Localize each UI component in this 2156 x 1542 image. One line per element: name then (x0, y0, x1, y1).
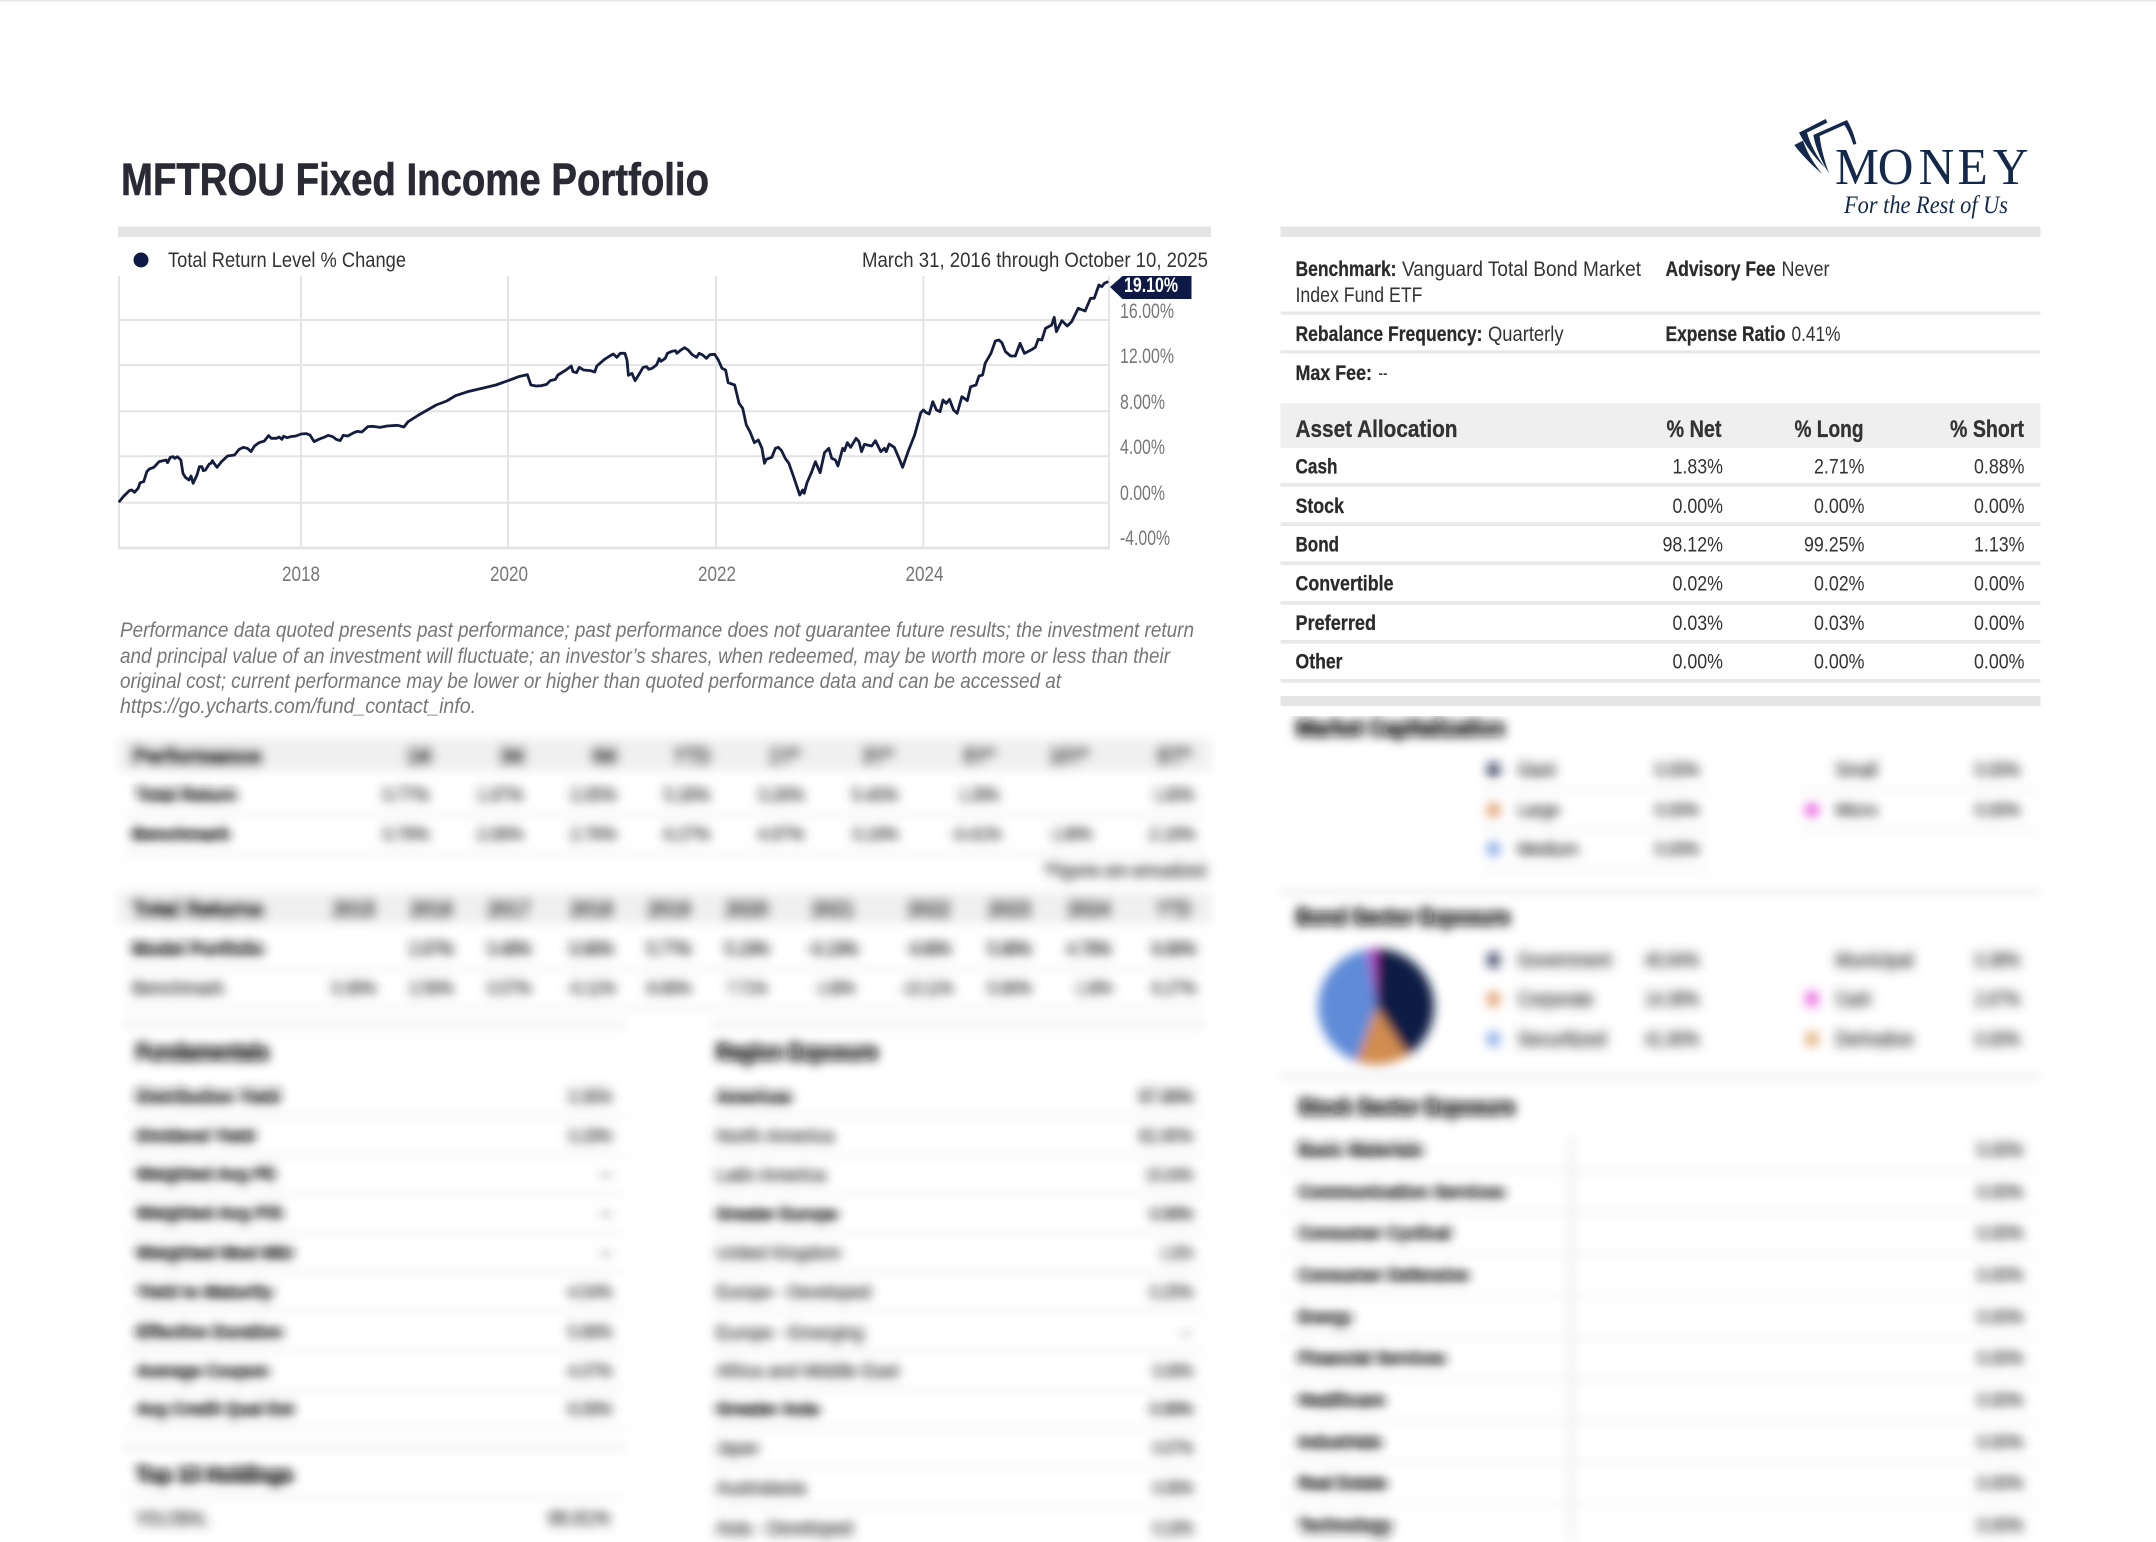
market cap legend: 0.00% (1975, 758, 2020, 782)
row: stock: 0.00% (1672, 494, 1723, 518)
performance row: total return: 1.97% (477, 783, 523, 807)
performance header: 10Y* (1049, 743, 1089, 770)
row: cash: 0.88% (1974, 455, 2024, 479)
total returns header: Total Returns (132, 896, 264, 923)
table: region exposure (blurred) (712, 1039, 1206, 1540)
footnote: annualized: *Figures are annualized (1044, 858, 1206, 882)
data line (119, 282, 1107, 501)
performance row: benchmark: 1.88% (1052, 822, 1092, 846)
holdings row: VGLOBAL (136, 1506, 208, 1530)
performance row: benchmark: 4.97% (758, 822, 804, 846)
y axis labels: 4.00% (1120, 435, 1165, 459)
table: fundamentals (blurred): 5.89% (568, 1320, 612, 1344)
row: convertible: 0.02% (1814, 572, 1864, 596)
table: fundamentals (blurred): Distribution Yield (136, 1085, 280, 1109)
disclaimer text: original cost; current performance may be lower or higher than quoted performance data and can be accessed at (120, 669, 1062, 693)
row: bond (1296, 533, 2024, 557)
total returns row: benchmark: Benchmark (132, 976, 224, 1000)
y axis labels (1120, 299, 1174, 550)
table: fundamentals (blurred): 8.58% (568, 1397, 612, 1421)
row: cash: Cash (1296, 455, 1338, 479)
table: total returns (blurred) (118, 892, 1211, 1027)
table: region exposure (blurred): Africa and Middle East (716, 1359, 899, 1383)
total returns header: 2022 (907, 896, 951, 923)
disclaimer text: https://go.ycharts.com/fund_contact_info. (120, 694, 476, 718)
market cap legend: Micro (1836, 798, 1878, 822)
holdings row: 98.81% (548, 1506, 610, 1530)
panel: stock sector exposure (blurred): 0.00% (1977, 1180, 2023, 1204)
table: region exposure (blurred): Europe - Emerging (716, 1321, 864, 1345)
panel: stock sector exposure (blurred): 0.00% (1977, 1471, 2023, 1495)
row: stock: Stock (1296, 494, 1344, 518)
row: other: 0.00% (1974, 650, 2024, 674)
table: region exposure (blurred): Greater Asia (716, 1397, 820, 1421)
panel: stock sector exposure (blurred): Communication Services (1298, 1180, 1505, 1204)
table: fundamentals (blurred): Yield to Maturity (136, 1280, 273, 1304)
table: fundamentals (blurred): 4.07% (568, 1359, 612, 1383)
table: region exposure (blurred): 97.99% (1139, 1085, 1193, 1109)
table: region exposure (blurred): Australasia (716, 1476, 806, 1500)
performance row: benchmark: 2.06% (477, 822, 523, 846)
title: MFTROU Fixed Income Portfolio (121, 154, 709, 205)
table: fundamentals (blurred): 4.54% (568, 1280, 612, 1304)
table: fundamentals (blurred): Weighted Med Mkt (136, 1241, 293, 1265)
row: cash: 2.71% (1814, 455, 1864, 479)
total returns row: benchmark: 6.27% (1152, 976, 1196, 1000)
legend: total return (134, 248, 406, 272)
total returns row: benchmark (132, 976, 1196, 1000)
total returns row: benchmark: -13.11% (901, 976, 953, 1000)
row: bond: 99.25% (1804, 533, 1864, 557)
row: cash: 1.83% (1672, 455, 1723, 479)
table: asset allocation (1280, 403, 2040, 683)
table header (1280, 403, 2040, 448)
total returns header: 2017 (487, 896, 531, 923)
panel: stock sector exposure (blurred): Technology (1298, 1513, 1392, 1537)
total returns header: 2024 (1067, 896, 1111, 923)
performance row: benchmark: 2.18% (1149, 822, 1195, 846)
total returns row: model portfolio: -9.86% (907, 937, 951, 961)
row: cash (1296, 455, 2024, 479)
bond sector legend: 0.00% (1975, 1027, 2020, 1051)
bond sector legend: Corporate (1518, 987, 1594, 1011)
table: fundamentals (blurred) (122, 1039, 626, 1530)
performance row: benchmark: 6.27% (664, 822, 710, 846)
total returns header: 2018 (570, 896, 614, 923)
performance row: total return: 5.28% (664, 783, 710, 807)
panel: stock sector exposure (blurred): Healthcare (1298, 1388, 1385, 1412)
benchmark: Index Fund ETF (1296, 283, 1422, 307)
panel: stock sector exposure (blurred): Real Estate (1298, 1471, 1387, 1495)
table: fundamentals (blurred): 3.36% (568, 1085, 612, 1109)
table: region exposure (blurred): 0.25% (1150, 1280, 1193, 1304)
table: region exposure (blurred): Latin America (716, 1163, 826, 1187)
market cap legend: Giant (1518, 758, 1556, 782)
total returns row: benchmark: 0.36% (332, 976, 376, 1000)
panel: stock sector exposure (blurred): 0.00% (1977, 1305, 2023, 1329)
total returns row: benchmark: 8.66% (647, 976, 691, 1000)
date range: March 31, 2016 through October 10, 2025 (862, 248, 1208, 272)
bond sector legend: 41.90% (1645, 1027, 1699, 1051)
table: fundamentals (blurred): Average Coupon (136, 1359, 269, 1383)
table: region exposure (blurred): United Kingdom (716, 1241, 841, 1265)
performance header: 3M (499, 743, 525, 770)
total returns header: 2021 (811, 896, 855, 923)
table: region exposure (blurred): Americas (716, 1085, 792, 1109)
bond sector legend: Cash (1836, 987, 1872, 1011)
table: performance (blurred) (118, 738, 1211, 882)
panel: stock sector exposure (blurred): 0.00% (1977, 1513, 2023, 1537)
region heading: Region Exposure (716, 1039, 878, 1066)
table header: % Long (1794, 416, 1864, 443)
performance row: total return: 3.26% (758, 783, 804, 807)
row: stock: 0.00% (1814, 494, 1864, 518)
benchmark (1296, 257, 1641, 307)
total returns row: benchmark: 1.36% (1076, 976, 1112, 1000)
logo tagline: For the Rest of Us (1843, 192, 2008, 219)
table: region exposure (blurred): 0.99% (1150, 1202, 1193, 1226)
panel: market capitalization (blurred) (1288, 716, 2026, 863)
top 10 holdings heading: Top 10 Holdings (136, 1462, 293, 1489)
row: bond: Bond (1296, 533, 1339, 557)
bond sector legend: 2.67% (1975, 987, 2020, 1011)
performance header: 3Y* (862, 743, 894, 770)
bond sector legend: Government (1518, 948, 1612, 972)
market cap legend: Large (1518, 798, 1560, 822)
performance row: total return: Total Return (136, 783, 237, 807)
table: fundamentals (blurred): -- (601, 1162, 611, 1186)
fundamentals heading: Fundamentals (136, 1039, 269, 1066)
legend dot (134, 252, 148, 268)
panel: stock sector exposure (blurred): 0.00% (1977, 1263, 2023, 1287)
row: bond: 1.13% (1974, 533, 2024, 557)
row: convertible: Convertible (1296, 572, 1394, 596)
row: other (1296, 650, 2024, 674)
row: bond: 98.12% (1662, 533, 1723, 557)
market cap legend: Small (1836, 758, 1878, 782)
table header: % Short (1950, 416, 2024, 443)
performance row: benchmark: 2.76% (570, 822, 616, 846)
header bar: right (1280, 226, 2040, 237)
panel: stock sector exposure (blurred): 0.00% (1977, 1430, 2023, 1454)
panel: stock sector exposure (blurred): Industrials (1298, 1430, 1382, 1454)
legend label: Total Return Level % Change (168, 248, 406, 272)
performance header (132, 743, 1192, 770)
panel: stock sector exposure (blurred): Consumer Cyclical (1298, 1221, 1451, 1245)
benchmark: Vanguard Total Bond Market (1402, 257, 1641, 281)
panel: stock sector exposure (blurred): 0.00% (1977, 1221, 2023, 1245)
table: fundamentals (blurred): 3.29% (568, 1124, 612, 1148)
table: region exposure (blurred): Europe - Developed (716, 1280, 871, 1304)
panel: fund details (1280, 257, 2040, 385)
market cap legend: 0.00% (1655, 798, 1699, 822)
row: stock: 0.00% (1974, 494, 2024, 518)
row: convertible: 0.02% (1672, 572, 1723, 596)
pie chart: bond sectors (1318, 949, 1434, 1065)
total returns row: benchmark: 5.66% (988, 976, 1032, 1000)
market cap legend (1488, 758, 2020, 861)
total returns row: model portfolio: 5.98% (988, 937, 1032, 961)
total returns header: 2020 (725, 896, 769, 923)
total returns row: benchmark: 7.71% (727, 976, 767, 1000)
table: region exposure (blurred): 0.06% (1153, 1476, 1193, 1500)
bond sector legend: 0.38% (1975, 948, 2020, 972)
total returns header: 2016 (410, 896, 454, 923)
bond sector legend: Derivative (1836, 1027, 1914, 1051)
performance header: ST* (1156, 743, 1192, 770)
table: region exposure (blurred): Japan (716, 1436, 759, 1460)
total returns row: model portfolio: 2.97% (410, 937, 454, 961)
performance row: total return: 1.39% (959, 783, 999, 807)
market cap legend: Medium (1518, 837, 1578, 861)
market cap legend: 0.00% (1975, 798, 2020, 822)
table: fundamentals (blurred): Weighted Avg P/S (136, 1201, 283, 1225)
total returns header: 2015 (332, 896, 376, 923)
performance header: 1M (406, 743, 432, 770)
row: preferred (1296, 611, 2024, 635)
benchmark: Benchmark: (1296, 257, 1396, 281)
panel: stock sector exposure (blurred): Energy (1298, 1305, 1352, 1329)
performance row: total return: 5.40% (852, 783, 898, 807)
x axis labels: 2018 (282, 562, 320, 586)
performance row: benchmark: -0.41% (951, 822, 1001, 846)
total returns row: model portfolio: -0.19% (808, 937, 858, 961)
panel: stock sector exposure (blurred): Financial Services (1298, 1346, 1446, 1370)
x axis labels: 2020 (490, 562, 528, 586)
total returns row: model portfolio: 3.48% (487, 937, 531, 961)
table: region exposure (blurred): Greater Europe (716, 1202, 838, 1226)
panel: bond sector exposure (blurred) (1280, 904, 2040, 1079)
y axis labels: 16.00% (1120, 299, 1174, 323)
x axis labels (282, 562, 944, 586)
performance header: 5Y* (963, 743, 995, 770)
stock sector heading: Stock Sector Exposure (1298, 1094, 1515, 1121)
total returns row: model portfolio: 6.66% (1152, 937, 1196, 961)
total returns row: benchmark: 3.57% (487, 976, 531, 1000)
total returns header: 2019 (647, 896, 691, 923)
bond sector legend: 40.64% (1645, 948, 1699, 972)
row: stock (1296, 494, 2024, 518)
market cap legend: 0.00% (1655, 758, 1699, 782)
advisory fee: Advisory Fee (1666, 257, 1776, 281)
table: region exposure (blurred): Asia - Developed (716, 1516, 853, 1540)
total returns row: benchmark: 2.56% (410, 976, 454, 1000)
total returns row: model portfolio: 5.19% (725, 937, 769, 961)
row: preferred: 0.00% (1974, 611, 2024, 635)
table: region exposure (blurred): 82.95% (1139, 1124, 1193, 1148)
expense ratio: Expense Ratio (1666, 322, 1786, 346)
section bar: right lower (1280, 696, 2040, 706)
performance row: total return: 0.77% (383, 783, 429, 807)
performance header: 6M (592, 743, 618, 770)
panel: stock sector exposure (blurred): Consumer Defensive (1298, 1263, 1469, 1287)
performance row: benchmark: 0.78% (383, 822, 429, 846)
row: other: 0.00% (1672, 650, 1723, 674)
market cap legend: 0.00% (1655, 837, 1699, 861)
icon: fanned bills (1794, 119, 1856, 174)
performance header: 1Y* (768, 743, 801, 770)
row: preferred: 0.03% (1814, 611, 1864, 635)
bond sector legend: 14.38% (1645, 987, 1699, 1011)
table: fundamentals (blurred): Effective Duration (136, 1320, 283, 1344)
advisory fee: Never (1782, 257, 1830, 281)
bond sector legend: Securitized (1518, 1027, 1606, 1051)
disclaimer text (120, 618, 1194, 718)
table: region exposure (blurred): 15.04% (1146, 1163, 1193, 1187)
performance row: total return: 2.05% (570, 783, 616, 807)
max fee: -- (1378, 361, 1388, 385)
bond sector legend: Municipal (1836, 948, 1914, 972)
total returns row: benchmark: -0.11% (568, 976, 616, 1000)
panel: stock sector exposure (blurred): 0.00% (1977, 1138, 2023, 1162)
total returns row: model portfolio: 4.78% (1067, 937, 1111, 961)
y axis labels: -4.00% (1120, 526, 1170, 550)
y axis labels: 12.00% (1120, 344, 1174, 368)
total returns row: benchmark: -1.86% (815, 976, 855, 1000)
row: other: Other (1296, 650, 1343, 674)
x axis labels: 2022 (698, 562, 736, 586)
table: region exposure (blurred): 0.07% (1153, 1436, 1193, 1460)
bond sector legend (1488, 948, 2020, 1051)
total returns header: 2023 (988, 896, 1032, 923)
row: convertible: 0.00% (1974, 572, 2024, 596)
table: fundamentals (blurred): Weighted Avg PE (136, 1162, 276, 1186)
table: fundamentals (blurred): -- (601, 1201, 611, 1225)
rebalance frequency: Quarterly (1488, 322, 1564, 346)
table: region exposure (blurred): 0.06% (1153, 1359, 1193, 1383)
logo wordmark: MONEY (1835, 138, 2028, 195)
performance row: benchmark (132, 822, 1195, 846)
table: fundamentals (blurred): Dividend Yield (136, 1124, 255, 1148)
total returns row: model portfolio: 0.66% (570, 937, 614, 961)
header bar: left (118, 226, 1211, 237)
expense ratio: 0.41% (1792, 322, 1840, 346)
table: region exposure (blurred): -- (1182, 1321, 1190, 1345)
performance row: benchmark: Benchmark (132, 822, 230, 846)
panel: stock sector exposure (blurred): 0.00% (1977, 1346, 2023, 1370)
total returns header (132, 896, 1192, 923)
y axis labels: 0.00% (1120, 481, 1165, 505)
table: fundamentals (blurred): Avg Credit Qual Est (136, 1397, 294, 1421)
line chart: total return (118, 274, 1192, 586)
total returns row: model portfolio: 5.77% (647, 937, 691, 961)
performance row: total return: 1.80% (1154, 783, 1194, 807)
panel: stock sector exposure (blurred): 0.00% (1977, 1388, 2023, 1412)
table: region exposure (blurred): 0.99% (1150, 1397, 1193, 1421)
total returns row: model portfolio (132, 937, 1196, 961)
table: region exposure (blurred): North America (716, 1124, 834, 1148)
disclaimer text: Performance data quoted presents past performance; past performance does not guarantee future results; the investment return (120, 618, 1194, 642)
total returns row: model portfolio: Model Portfolio (132, 937, 264, 961)
y axis labels: 8.00% (1120, 390, 1165, 414)
row: preferred: Preferred (1296, 611, 1376, 635)
total returns header: YTD (1156, 896, 1192, 923)
table: fundamentals (blurred): -- (601, 1241, 611, 1265)
table: region exposure (blurred): 1.32% (1160, 1241, 1193, 1265)
holdings row (136, 1506, 610, 1530)
row: convertible (1296, 572, 2024, 596)
bond sector heading: Bond Sector Exposure (1296, 904, 1510, 931)
performance row: benchmark: 3.19% (852, 822, 898, 846)
table header: Asset Allocation (1296, 416, 1458, 443)
x axis labels: 2024 (906, 562, 944, 586)
performance header: YTD (673, 743, 711, 770)
panel: stock sector exposure (blurred): Basic Materials (1298, 1138, 1423, 1162)
max fee: Max Fee: (1296, 361, 1372, 385)
market cap heading: Market Capitalization (1296, 715, 1505, 742)
performance header: Performance (132, 743, 262, 770)
panel: stock sector exposure (blurred) (1280, 1094, 2040, 1542)
table: region exposure (blurred): 0.16% (1153, 1516, 1193, 1540)
value callout: 19.10%: 19.10% (1124, 274, 1178, 297)
rebalance frequency: Rebalance Frequency: (1296, 322, 1482, 346)
performance row: total return (136, 783, 1194, 807)
row: other: 0.00% (1814, 650, 1864, 674)
logo: Money For the Rest of Us (1794, 119, 2028, 219)
disclaimer text: and principal value of an investment will fluctuate; an investor’s shares, when redeemed, may be worth more or less than their (120, 644, 1171, 668)
table header: % Net (1666, 416, 1722, 443)
row: preferred: 0.03% (1672, 611, 1723, 635)
